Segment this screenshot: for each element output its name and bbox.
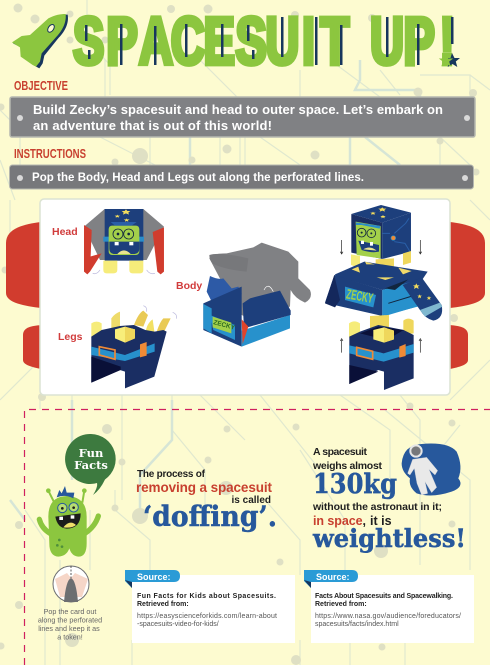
red tabs left	[6, 222, 41, 369]
source card: left: Fun Facts for Kids about Spacesuits.	[137, 593, 276, 600]
fact: doffing	[136, 469, 277, 533]
fact: doffing: is called	[232, 495, 271, 506]
icon: rocket	[12, 14, 68, 68]
fun facts bubble: Fun	[79, 446, 104, 460]
illustration: assembled zecky	[325, 205, 442, 390]
fact: weight of spacesuit: it is	[370, 514, 392, 528]
caption: token instructions: Pop the card out	[44, 607, 96, 616]
fact: doffing: The process of	[137, 469, 206, 480]
arrows	[340, 240, 422, 353]
fact: weight of spacesuit: in space,	[313, 514, 366, 528]
heading: instructions: INSTRUCTIONS	[14, 146, 86, 161]
source card: right: Source:	[316, 572, 350, 582]
legs	[370, 315, 389, 328]
icon: token punch-out	[53, 566, 89, 602]
red tabs right	[450, 222, 485, 369]
label: body: Body	[176, 280, 202, 292]
fact: weight of spacesuit: A spacesuit	[313, 446, 368, 458]
icon: star on exclamation mark	[439, 53, 460, 67]
source card: right: spacesuits/facts/index.html	[315, 621, 399, 628]
fun facts bubble: Facts	[74, 458, 108, 472]
source card: left: https://easyscienceforkids.com/learn-about	[137, 613, 277, 620]
panel: instructions: Pop the Body, Head and Legs out along the perforated lines.	[32, 172, 364, 184]
fact: weight of spacesuit: weightless!	[312, 524, 466, 553]
fact: weight of spacesuit: weighs almost	[312, 460, 382, 472]
fact: weight of spacesuit: without the astronaut in it;	[312, 501, 442, 513]
illustration: body net	[203, 243, 311, 347]
panel: instructions	[10, 165, 474, 189]
panel: objective	[10, 97, 475, 137]
fact: weight of spacesuit	[312, 446, 466, 553]
fun facts bubble	[65, 434, 116, 495]
label: legs: Legs	[58, 331, 83, 343]
text: zecky on body: ZECKY	[212, 319, 236, 332]
caption: token instructions	[38, 607, 102, 642]
source card: left: -spacesuits-video-for-kids/	[137, 621, 219, 628]
source card: left	[125, 570, 295, 643]
illustration: head net	[84, 209, 164, 274]
icon: astronaut	[402, 444, 461, 495]
fact: doffing: removing a spacesuit	[136, 480, 272, 495]
source card: left: Retrieved from:	[137, 601, 189, 608]
caption: token instructions: a token!	[57, 632, 83, 642]
caption: token instructions: along the perforated	[38, 616, 102, 624]
title: SPACESUIT UP!	[73, 4, 455, 79]
mascot: green monster	[39, 486, 98, 557]
fact: doffing: ‘doffing’.	[143, 500, 277, 533]
panel: objective: an adventure that is out of this world!	[33, 118, 272, 133]
fact: weight of spacesuit: 130kg	[313, 469, 397, 500]
illustration: legs net	[91, 306, 177, 388]
perforated line	[24, 410, 490, 665]
source card: right: https://www.nasa.gov/audience/foreducators/	[315, 613, 461, 620]
source card: right	[304, 570, 474, 643]
torso	[335, 262, 428, 290]
source card: left: Source:	[137, 572, 171, 582]
panel: assembly steps	[40, 199, 450, 395]
heading: objective: OBJECTIVE	[14, 78, 68, 93]
label: zecky logo: ZECKY	[345, 287, 375, 307]
arm	[403, 277, 442, 321]
panel: objective: Build Zecky’s spacesuit and head to outer space. Let’s embark on	[33, 102, 443, 117]
source card: right: Facts About Spacesuits and Spacewalking.	[315, 593, 453, 600]
source card: right: Retrieved from:	[315, 601, 367, 608]
caption: token instructions: lines and keep it as	[38, 624, 100, 633]
label: head: Head	[52, 226, 78, 238]
connectors	[351, 254, 360, 268]
head cube	[351, 205, 411, 223]
